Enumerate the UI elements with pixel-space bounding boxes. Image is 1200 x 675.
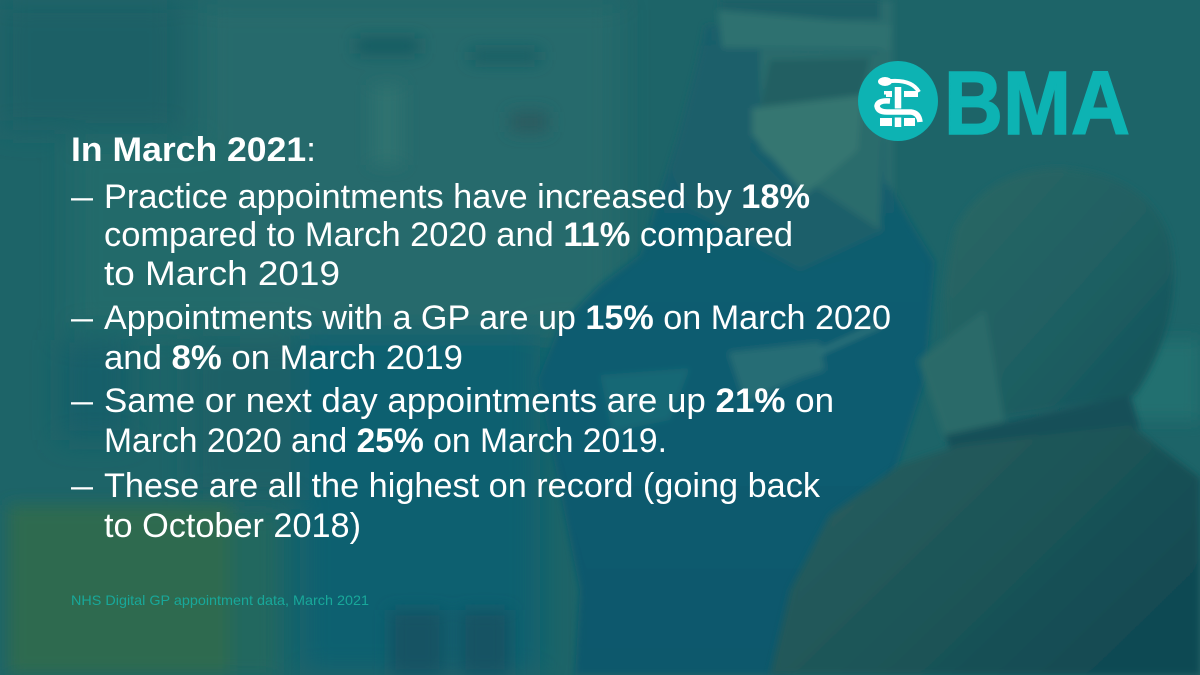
gloved hands [728, 342, 825, 402]
clinician gown [538, 25, 935, 675]
bullet 3: same or next day appointments: Same or next day appointments are up 21% on [104, 382, 834, 420]
bullet 2: appointments with a GP: Appointments with a GP are up 15% on March 2020 [104, 299, 891, 337]
bullet 1: practice appointments: — [71, 178, 93, 216]
shield light panel [760, 0, 893, 330]
bullet 2: appointments with a GP: and 8% on March 2019 [104, 339, 463, 377]
patient body [770, 425, 1200, 675]
bullet 3: same or next day appointments: — [71, 382, 93, 420]
bullet 3: same or next day appointments: March 2020 and 25% on March 2019. [104, 422, 667, 460]
bullet 4: highest on record [71, 467, 821, 545]
bullet 2: appointments with a GP: — [71, 299, 93, 337]
heading: In March 2021: [71, 131, 316, 169]
logo wordmark: BMA [944, 54, 1130, 154]
bullet 1: practice appointments: compared to March 2020 and 11% compared [104, 216, 793, 254]
snake S-curve [876, 99, 921, 122]
bullet 1: practice appointments: Practice appointments have increased by 18% [104, 178, 810, 216]
bullet 3: same or next day appointments [71, 382, 834, 460]
bullet 4: highest on record: to October 2018) [104, 507, 361, 545]
patient head [944, 168, 1173, 425]
bullet 2: appointments with a GP [71, 299, 891, 377]
surgical mask [752, 95, 862, 195]
lower coil [880, 118, 915, 126]
bullet 4: highest on record: — [71, 467, 93, 505]
bullet 4: highest on record: These are all the highest on record (going back [104, 467, 821, 505]
bullet 1: practice appointments [71, 178, 810, 293]
source note: NHS Digital GP appointment data, March 2021 [71, 592, 369, 608]
face shield band [718, 10, 892, 50]
patient face mask [918, 310, 1005, 440]
hood [720, 0, 880, 20]
snake head and upper coil [880, 81, 919, 92]
bullet 1: practice appointments: to March 2019 [104, 255, 340, 293]
icon: BMA snake and staff roundel [858, 61, 938, 141]
patient collar [945, 395, 1140, 475]
staff [895, 87, 901, 127]
